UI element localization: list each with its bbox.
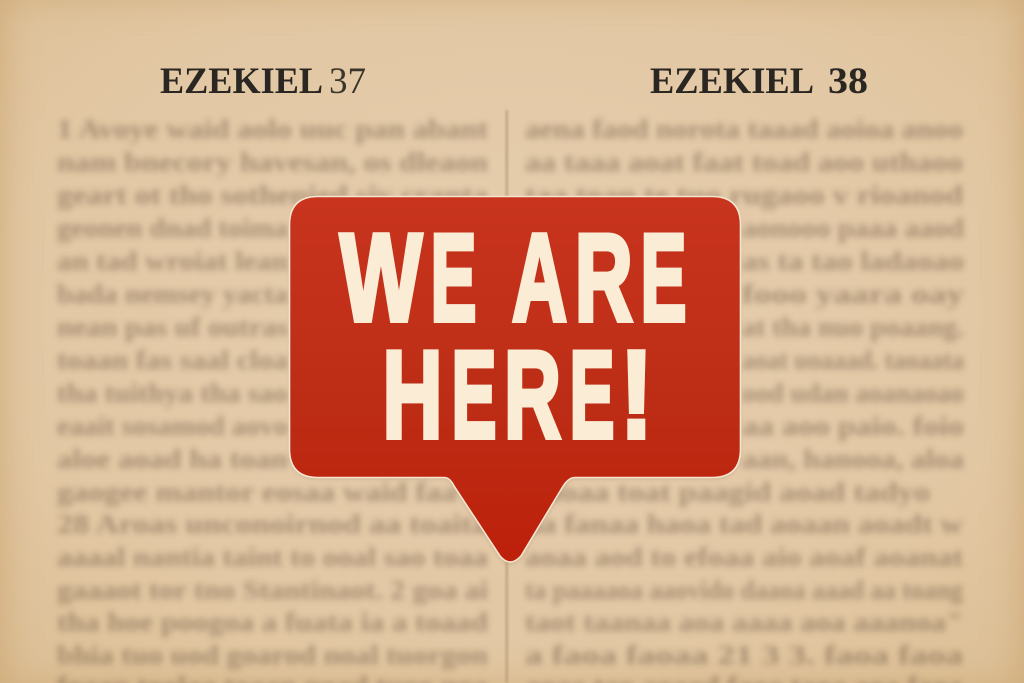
center gutter line xyxy=(506,110,508,683)
blurred text column: left page: tha hoe poogoa a fuata ia a toaad xyxy=(57,607,488,637)
callout text: WE ARE: W xyxy=(340,210,422,348)
blurred text column: left page: geart ot tho sothenied siv cranta xyxy=(57,180,489,210)
callout text: HERE!: E xyxy=(452,326,496,464)
blurred text column: right page: aa aoo paio. foio xyxy=(742,411,964,441)
blurred text column: left page: toaan fas saal cloa xyxy=(57,345,289,375)
blurred text column: right page: fooo yaara oay xyxy=(742,279,965,309)
callout text: HERE!: H xyxy=(382,326,442,464)
blurred text column: right page: at tha nuo poaang. xyxy=(742,312,964,342)
blurred text column: right page: ta paaaaoa aaovido daaoa aaad aa toang xyxy=(525,575,963,605)
blurred text column: right page: aoaa aod to efoaa aio aoaf aoanat xyxy=(525,542,963,572)
blurred text column: left page: an tad wroiat lean xyxy=(57,246,288,276)
blurred text column: left page: nam bnecory havesan, os dleaon xyxy=(57,147,488,177)
heading: Ezekiel 37: 37 xyxy=(329,61,366,102)
blurred text column: right page: aa fanaa haoa tad aoaan aoadt w xyxy=(525,509,964,539)
heading: Ezekiel 37: EZEKIEL xyxy=(160,61,323,102)
blurred text column: right page: taot taanaa aoa aaaa aoa aaanoa" xyxy=(525,607,963,637)
callout text: WE ARE: R xyxy=(575,210,633,348)
blurred text column: left page: 28 Aroas unconoirnod aa toaita xyxy=(57,509,489,539)
blurred text column: right page: aoat uoaaad. taoaata xyxy=(742,345,964,375)
blurred text column: right page: aena faod norota taaad aoioa anoo xyxy=(525,114,963,144)
callout text: WE ARE: A xyxy=(512,210,567,348)
heading: Ezekiel 38: EZEKIEL xyxy=(650,61,814,102)
callout text: HERE!: R xyxy=(504,326,561,464)
blurred text column: right page: aoaa toat paagid aoad tadyo xyxy=(545,477,930,507)
callout text: WE ARE: E xyxy=(640,210,686,348)
blurred text column: left page: gaogee mantor eosaa waid faa xyxy=(57,477,458,507)
blurred text column: right page: taa toan te tuo rugaoo v rioanod xyxy=(525,180,963,210)
bubble shadow xyxy=(290,199,740,564)
callout text: WE ARE: E xyxy=(430,210,476,348)
blurred text column: right page: aonooo paaa aaod xyxy=(742,213,964,243)
blurred text column: left page xyxy=(57,114,489,683)
callout: speech bubble xyxy=(290,196,740,564)
blurred text column: left page: gaaaot tor tno Stantinaot. 2 goa ai xyxy=(57,575,489,605)
blurred text column: left page: nean pas uf outras xyxy=(57,312,288,342)
heading: Ezekiel 38: 38 xyxy=(828,61,868,102)
blurred text column: left page: bada nemsey yacta xyxy=(57,279,289,309)
blurred text column: right page: a faoa faoaa 21 3 3. faoa faoa xyxy=(525,640,964,670)
blurred text column: left page: aaaal nantia taint to ooal sao toaa xyxy=(57,542,489,572)
blurred text column: left page: 1 Avoye waid aolo uuc pan abant xyxy=(57,114,488,144)
blurred text column: right page: aa taaa aoat faat toad aoo uthaoo xyxy=(525,147,963,177)
blurred text column: right page: ood udan aoanaoao xyxy=(742,378,964,408)
bubble shape xyxy=(290,196,740,562)
blurred text column: right page: aan, hanooa, aloa xyxy=(742,444,965,474)
callout text: WE ARE xyxy=(340,210,686,348)
callout text: HERE! xyxy=(382,326,653,464)
blurred text column: left page: bhia tuo uod goarod noal tuorgon xyxy=(57,640,488,670)
blurred text column: left page: geonen dnad toima xyxy=(57,213,289,243)
callout text: HERE!: E xyxy=(570,326,614,464)
blurred text column: left page: aloe aoad ha toan xyxy=(57,444,288,474)
blurred text column: right page: as ta tao ladaoao xyxy=(742,246,964,276)
callout text: HERE!: ! xyxy=(620,326,653,464)
blurred text column: left page: tha tuithya tha sao xyxy=(57,378,288,408)
blurred text column: right page xyxy=(525,114,965,683)
blurred text column: left page: eaait sosamod aovo xyxy=(57,411,288,441)
